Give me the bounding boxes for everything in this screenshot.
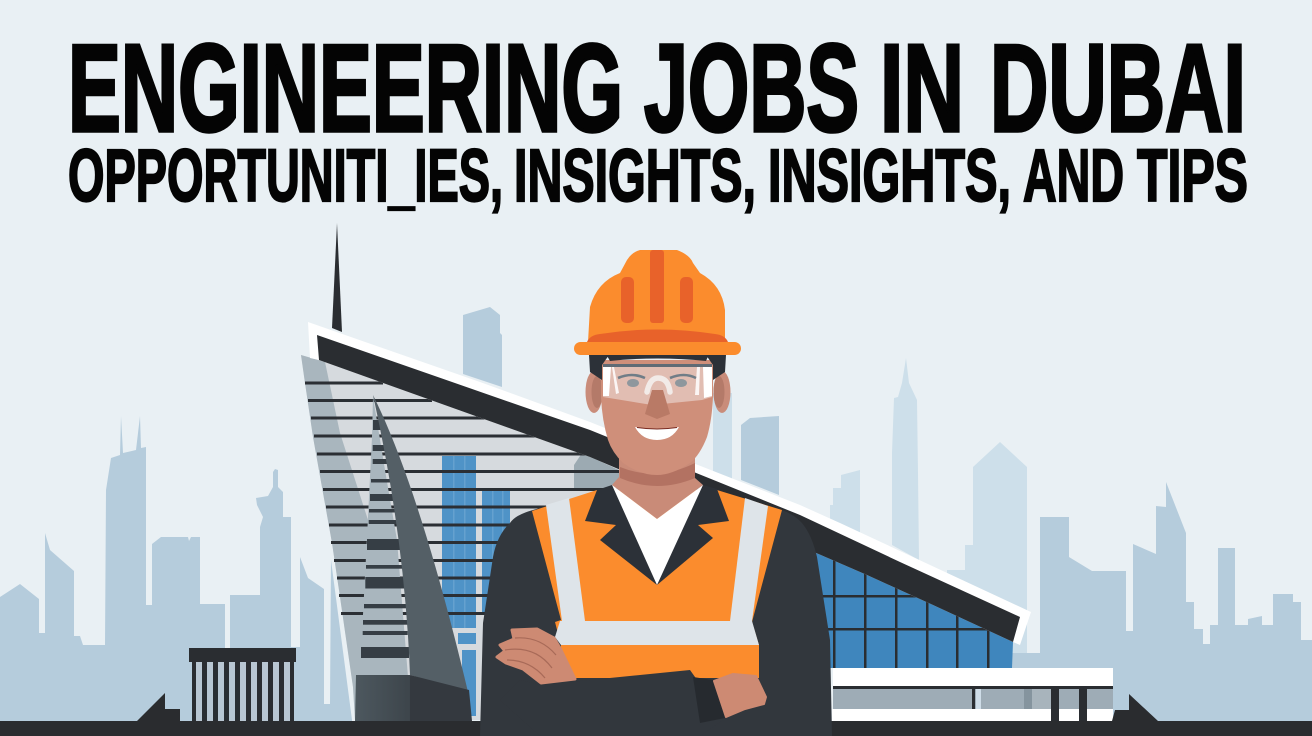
stair column stripes [361,420,409,658]
smile [635,427,679,440]
low white pavilion [832,668,1113,721]
safety goggles [603,364,712,405]
title [68,20,1248,217]
horizontal louvres [305,383,620,614]
dark roof band [317,335,1020,642]
facade shaded band [301,355,372,720]
right skyline silhouette [1005,482,1312,736]
nose [645,390,670,419]
subtitle: INSIGHTS, [514,134,756,217]
lapels [585,485,729,585]
heading: IN [880,20,964,158]
safety vest [532,490,782,678]
small columned structure [189,648,296,721]
hard hat [574,250,741,355]
blue glass facade right [816,553,1013,668]
right sleeve cuff [693,677,725,723]
subtitle: TIPS [1137,134,1248,217]
heading: ENGINEERING [68,20,623,158]
subtitle [68,134,1248,217]
shirt [607,485,708,585]
right hand [714,674,766,717]
background towers behind figure [463,307,779,495]
neck shadow [620,463,695,486]
landmark spire [332,223,342,332]
heading: JOBS [644,20,859,158]
white roof edge [308,322,1031,645]
neck [612,453,703,519]
stair column [357,397,408,677]
hair [589,354,726,380]
ears [586,371,730,413]
eyes [627,379,687,387]
base block [355,675,410,721]
left hand [497,629,575,683]
main building [301,322,1031,721]
eyebrows [618,375,696,378]
ground strip [0,693,1312,736]
striped facade [301,355,640,720]
left skyline silhouette [0,416,352,736]
crossed arm [500,670,723,736]
subtitle: OPPORTUNITI_IES, [68,134,503,217]
goggle nose bridge [647,378,670,392]
engineer figure [480,250,832,736]
face [601,360,713,475]
subtitle: INSIGHTS, [768,134,1011,217]
ear shadows [592,376,724,408]
blue windows [442,456,510,716]
shaded panel near figure [574,453,630,490]
distant light skyline [713,358,1027,670]
subtitle: AND [1023,134,1124,217]
jacket [480,492,832,736]
window grid highlights [453,456,504,628]
angled blade [373,395,468,692]
reflective strips [546,498,768,645]
